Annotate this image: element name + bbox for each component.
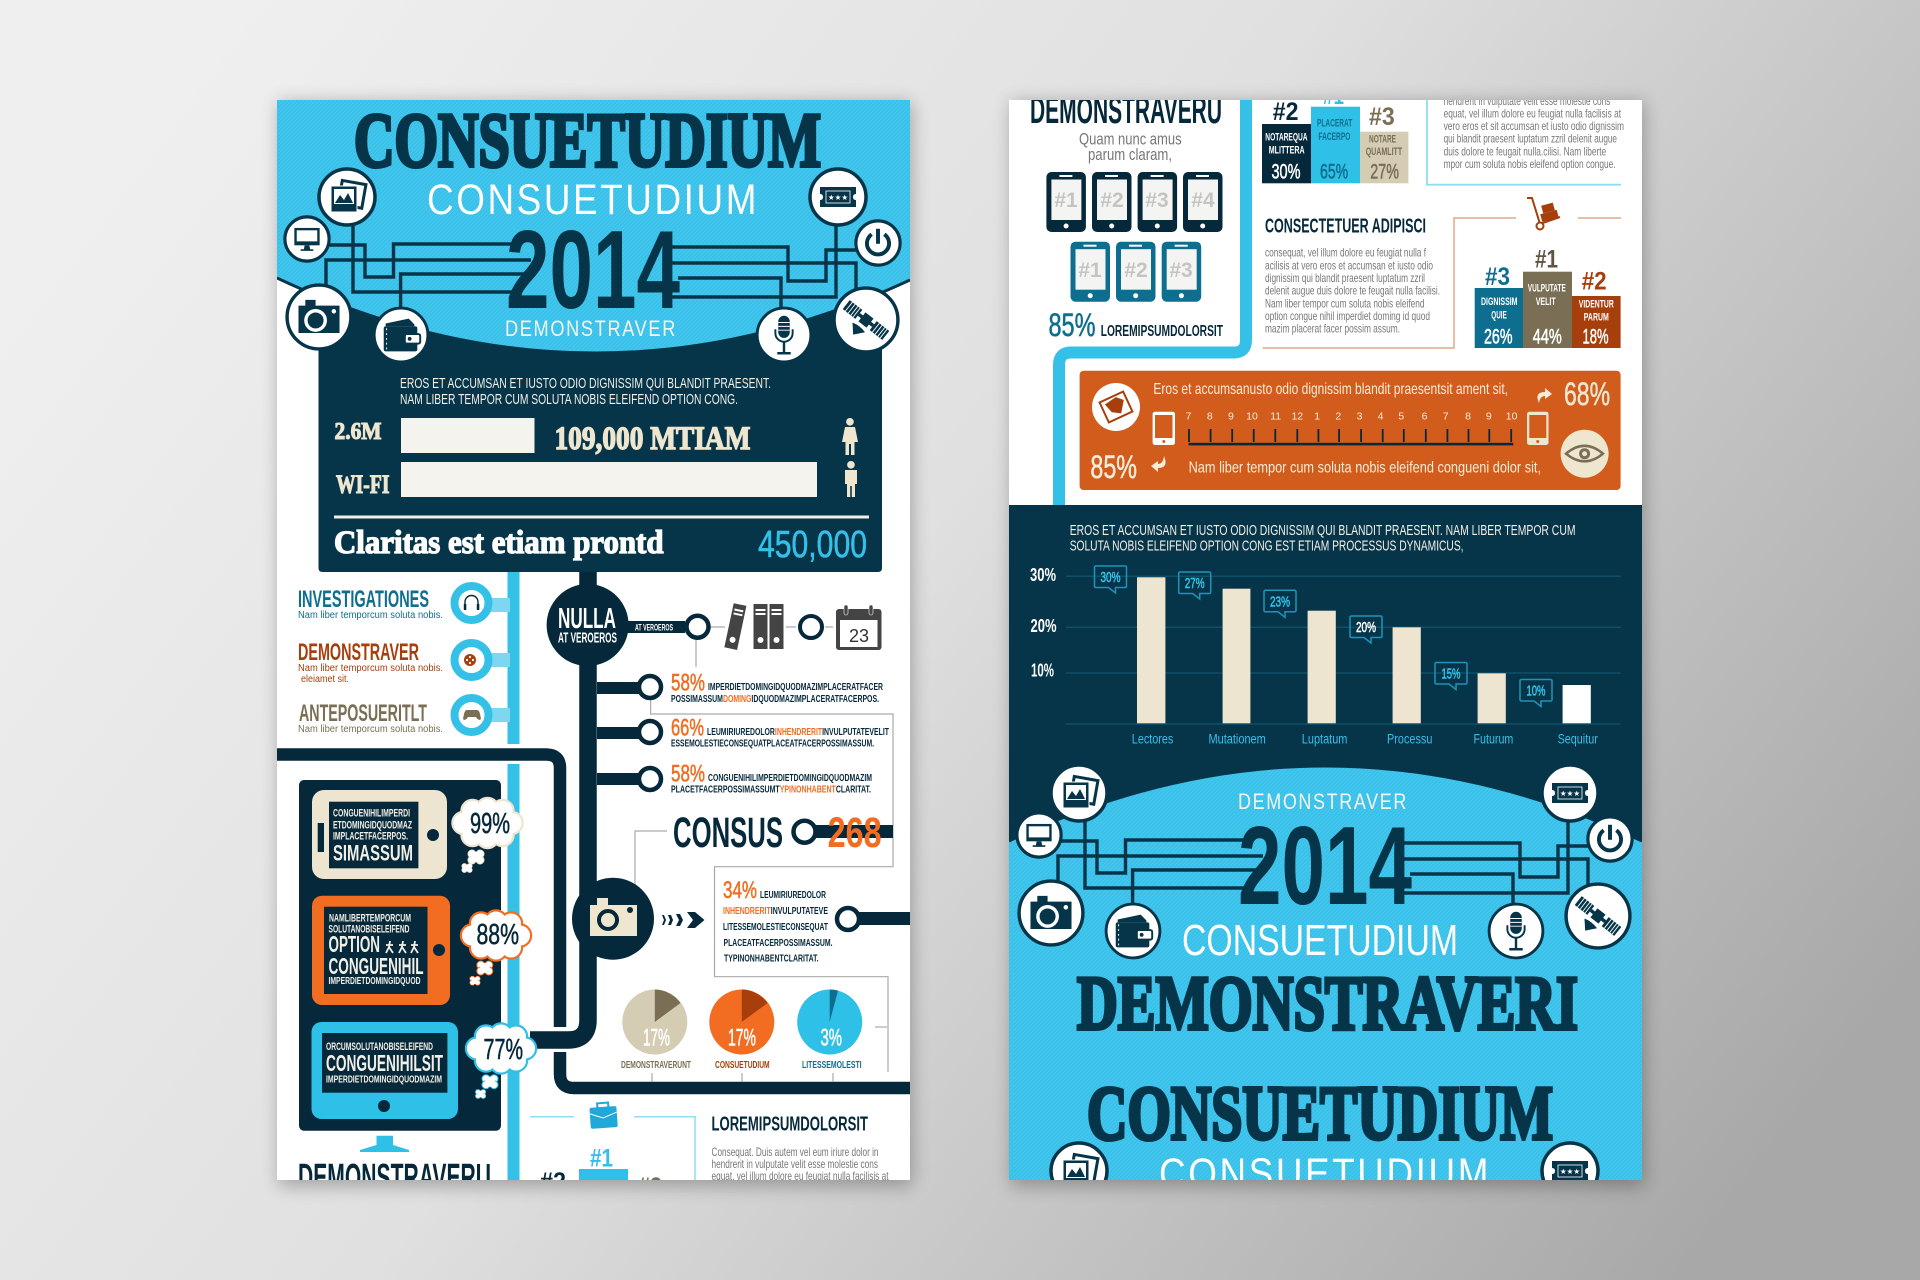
callout: 10% [1520, 680, 1552, 706]
podium: blue: NOTARE [1369, 133, 1396, 145]
footer label: DEMONSTRAVER [1238, 789, 1408, 814]
network lines [326, 225, 856, 312]
y axis labels: 20% [1030, 616, 1056, 636]
podium: blue: 30% [1272, 160, 1300, 183]
stat: 85%: 85% [1048, 307, 1096, 343]
blue vertical rail [508, 572, 520, 1180]
footer subtitle: CONSUETUDIUM [1182, 916, 1458, 965]
text block: 34%: TYPINONHABENTCLARITAT. [724, 953, 819, 965]
consus value: 268 [828, 809, 882, 857]
podium: rust: #2 [1582, 267, 1607, 295]
body text: consectetuer: Nam liber tempor cum soluta nobis eleifend [1265, 296, 1424, 310]
y axis labels: 30% [1030, 565, 1056, 585]
body text: top [1444, 94, 1624, 171]
icon: wallet [374, 308, 428, 362]
chart intro text: EROS ET ACCUMSAN ET IUSTO ODIO DIGNISSIM QUI BLANDIT PRAESENT. NAM LIBER TEMPOR CUM [1070, 522, 1576, 539]
arrow [1151, 456, 1166, 472]
podium: blue: QUAMLITT [1366, 146, 1402, 158]
consus bar and ring [794, 821, 893, 843]
phone rankings: dark row: #4 [1191, 189, 1215, 212]
body text: top: duis dolore te feugait nulla.cilisi. Nam liberte [1444, 144, 1606, 158]
icon: monitor [1017, 813, 1061, 857]
stat row: 66%: ESSEMOLESTIECONSEQUATPLACEATFACERPOSSIMASSUM. [671, 738, 874, 750]
body text [712, 1145, 889, 1183]
icon: binders [724, 603, 784, 650]
pie: demonstraverunt [621, 990, 691, 1071]
icon: camera [1019, 881, 1083, 945]
title: CONSUETUDIUM [354, 97, 821, 183]
thin connector lines [635, 627, 893, 1082]
stat label: WI-FI: WI-FI [336, 470, 390, 499]
timeline: 6 [1422, 410, 1428, 422]
stat label: 2.6M: 2.6M [334, 419, 382, 445]
timeline: 8 [1207, 410, 1213, 422]
stat: 68%: 68% [1564, 376, 1610, 412]
podium: rust: VULPUTATE [1528, 283, 1566, 295]
heading: demonstraveru: DEMONSTRAVERU [1030, 90, 1222, 132]
pie: demonstraverunt: DEMONSTRAVERUNT [621, 1059, 691, 1071]
x axis labels: Futurum [1474, 731, 1513, 746]
body text: consectetuer: consequat, vel illum dolore eu feugiat nulla f [1265, 246, 1426, 260]
callout: 27% [1179, 572, 1211, 599]
pie: consuetudium [709, 990, 774, 1071]
icon: microphone [1489, 904, 1543, 958]
phone rankings: dark row [1046, 172, 1222, 232]
icon: gamepad [454, 698, 488, 732]
icon: ticket repeat [1542, 1143, 1598, 1199]
callout: 30%: 30% [1100, 569, 1120, 586]
text block: 34%: INHENDRERITINVULPUTATEVE [723, 905, 828, 917]
arrow [1537, 388, 1552, 403]
text block: 34%: LITESSEMOLESTIECONSEQUAT [723, 921, 828, 933]
podium start: #3 [638, 1173, 662, 1201]
repeated subtitle: CONSUETUDIUM [1159, 1150, 1491, 1198]
branch: at veroeros: AT VEROEROS [635, 623, 673, 633]
callout: 23%: 23% [1270, 593, 1290, 610]
bar: 2.6M [401, 418, 534, 453]
heading: DEMONSTRAVER [298, 639, 419, 666]
x axis labels: Lectores [1132, 731, 1173, 746]
text line 2: Nam liber tempor cum soluta nobis eleifend congueni dolor sit, [1189, 460, 1541, 477]
arrows [662, 912, 704, 928]
icon: map badge [1092, 383, 1140, 431]
stat label: LOREMIPSUMDOLORSIT [1101, 323, 1223, 340]
chart intro text [1070, 522, 1576, 555]
icon: photos repeat [1051, 1143, 1107, 1199]
stat row: 58%: IMPERDIETDOMINGIDQUODMAZIMPLACERATFACER [708, 681, 883, 693]
thought bubble: 88% [461, 910, 531, 985]
stat row: 58%: 58% [671, 670, 705, 697]
heading: lorem ipsum: LOREMIPSUMDOLORSIT [712, 1114, 868, 1136]
body text: consectetuer: dignissim qui blandit praesent luptatum zzril [1265, 271, 1425, 285]
text block: 34% [723, 877, 833, 965]
year: 2014 [1238, 804, 1412, 928]
heading: INVESTIGATIONES [298, 586, 429, 613]
bars [1137, 577, 1591, 723]
subtitle: CONSUETUDIUM [427, 176, 759, 224]
timeline: 2 [1335, 410, 1341, 422]
pie: litessemolesti: 3% [820, 1025, 842, 1052]
phone rankings: teal row: #3 [1169, 259, 1193, 282]
icon: eye [1561, 430, 1609, 478]
body text: consectetuer: delenit augue duis dolore te feugait nulla facilisi. [1265, 284, 1440, 298]
footer title: DEMONSTRAVERI [1077, 960, 1578, 1046]
device: tablet: OPTION [328, 931, 380, 957]
x axis labels: Luptatum [1302, 731, 1347, 746]
podium: rust: #1 [1535, 246, 1558, 274]
repeated title: CONSUETUDIUM [1087, 1070, 1553, 1156]
footer: blue arch [1009, 766, 1642, 1182]
caption [298, 663, 443, 685]
total label: Claritas est etiam prontd [334, 525, 664, 561]
total value: 450,000 [758, 524, 867, 566]
blue rail [1059, 100, 1246, 505]
podium: blue: MLITTERA [1269, 144, 1305, 156]
phone rankings: teal row [1070, 242, 1201, 302]
thought bubble: 99% [452, 798, 522, 873]
hub: nulla: AT VEROEROS [558, 630, 617, 647]
light blue frame [1427, 100, 1621, 185]
podium: rust: DIGNISSIM [1481, 296, 1518, 308]
callout: 27%: 27% [1185, 575, 1205, 592]
device: phone: CONGUENIHILIMPERDI [333, 808, 410, 820]
branch: at veroeros [625, 616, 708, 638]
caption: Nam liber temporcum soluta nobis. [298, 610, 443, 621]
monitor stand [360, 1136, 409, 1152]
description text: EROS ET ACCUMSAN ET IUSTO ODIO DIGNISSIM QUI BLANDIT PRAESENT. [400, 375, 771, 392]
text line 1: Eros et accumsanusto odio dignissim blandit praesentsit ament sit, [1153, 381, 1508, 398]
podium: rust: VELIT [1536, 296, 1556, 308]
callout: 15%: 15% [1442, 666, 1460, 682]
icon: headphones [454, 586, 488, 620]
device: monitor: IMPERDIETDOMINGIDQUODMAZIM [326, 1074, 442, 1086]
phone rankings: teal row: #2 [1124, 259, 1148, 282]
x axis labels [1132, 731, 1598, 746]
ring with bar [837, 908, 910, 930]
thought bubble: 77%: 77% [484, 1034, 523, 1066]
x axis labels: Processu [1387, 731, 1432, 746]
pie: consuetudium: 17% [728, 1025, 756, 1052]
timeline: 7 [1186, 410, 1192, 422]
thin blue frame [530, 1117, 695, 1180]
icon: hand cart [1527, 198, 1560, 230]
x axis labels: Mutationem [1208, 731, 1266, 746]
orange frame [1262, 218, 1621, 348]
device: tablet [312, 896, 450, 1005]
text block: 34%: LEUMIRIUREDOLOR [760, 889, 826, 901]
icon: film reel [454, 643, 488, 677]
text block: 34%: 34% [723, 877, 757, 904]
podium: rust: QUIE [1491, 309, 1507, 321]
consus heading: CONSUS [673, 809, 783, 857]
hub: camera [572, 878, 654, 960]
x axis labels: Sequitur [1558, 731, 1598, 746]
timeline: 12 [1291, 410, 1303, 422]
ring [800, 616, 822, 638]
callout: 10%: 10% [1526, 682, 1546, 700]
timeline: 10 [1506, 410, 1518, 422]
podium: blue: PLACERAT [1317, 118, 1352, 130]
heading: consectetuer: CONSECTETUER ADIPISCI [1265, 216, 1426, 238]
callout: 20%: 20% [1356, 619, 1376, 636]
podium: rust: VIDENTUR [1579, 298, 1614, 310]
device: tablet: SOLUTANOBISELEIFEND [328, 923, 410, 935]
timeline: 4 [1378, 410, 1384, 422]
body text: top: qui blandit praesent luptatum zzril delenit augue [1444, 132, 1617, 146]
stat row: 66%: LEUMIRIUREDOLORINHENDRERITINVULPUTATEVELIT [707, 726, 889, 738]
device: tablet: NAMLIBERTEMPORCUM [329, 913, 411, 925]
icon: ticket [1542, 765, 1598, 821]
device: phone [312, 790, 447, 879]
podium: rust: 44% [1533, 325, 1562, 348]
podium: blue: 65% [1320, 160, 1348, 183]
description text [400, 378, 770, 404]
year: 2014 [506, 208, 680, 332]
panel: devices [299, 780, 501, 1131]
body text: consectetuer: mazim placerat facer possim assum. [1265, 322, 1400, 336]
dark pipe [277, 754, 910, 1088]
panel: orange timeline [1080, 371, 1621, 490]
arch edge [1009, 766, 1642, 841]
stat row: 66% [597, 715, 889, 750]
icon: satellite [834, 288, 898, 352]
icon: calendar: 23 [849, 626, 869, 646]
description text: NAM LIBER TEMPOR CUM SOLUTA NOBIS ELEIFEND OPTION CONG. [400, 391, 738, 408]
timeline [1186, 410, 1518, 445]
podium: rust: #3 [1485, 263, 1510, 291]
dark trunk [530, 572, 588, 1040]
body text: top: mpor cum soluta nobis eleifend option congue. [1444, 157, 1616, 171]
body text: top: vero eros et sit accumsan et iusto odio dignissim [1444, 119, 1624, 133]
phone rankings: dark row: #2 [1100, 189, 1124, 212]
thought bubble: 77% [466, 1024, 536, 1099]
icon: ticket [810, 169, 866, 225]
phone rankings: teal row: #1 [1078, 259, 1102, 282]
poster panel: right [1009, 82, 1642, 1199]
card shadows [279, 102, 1644, 1186]
icon: microphone [757, 308, 811, 362]
icon: satellite [1566, 884, 1630, 948]
stat row: 58%: POSSIMASSUMDOMINGIDQUODMAZIMPLACERATFACERPOS. [671, 693, 879, 705]
timeline: 9 [1486, 410, 1492, 422]
podium start: #2 [540, 1168, 566, 1196]
icon: power [1588, 817, 1632, 861]
phone rankings: dark row: #1 [1054, 189, 1078, 212]
body text: top: hendrerit in vulputate velit esse molestie cons [1444, 94, 1610, 108]
bar: WI-FI [401, 462, 817, 497]
icon: power [856, 221, 900, 265]
callout: 20% [1350, 616, 1382, 643]
callout: 30% [1094, 566, 1126, 593]
body text: consectetuer: option congue nihil imperdiet doming id quod [1265, 309, 1430, 323]
stat row: 58% second: CONGUENIHILIMPERDIETDOMINGIDQUODMAZIM [708, 772, 872, 784]
podium: blue: FACERPO [1318, 131, 1351, 143]
subheading: Quam nunc amus [1079, 129, 1182, 148]
body text: equat, vel illum dolore eu feugiat nulla facilisis at [712, 1169, 889, 1183]
pie: consuetudium: CONSUETUDIUM [715, 1059, 770, 1071]
device: phone: SIMASSUM [333, 841, 413, 866]
podium start: #1 [590, 1145, 613, 1173]
pie: litessemolesti [797, 990, 862, 1071]
stat row: 58% [597, 670, 883, 705]
pie: litessemolesti: LITESSEMOLESTI [802, 1059, 862, 1071]
icon: man [845, 461, 857, 497]
chart intro text: SOLUTA NOBIS ELEIFEND OPTION CONG EST ETIAM PROCESSUS DYNAMICUS, [1070, 538, 1464, 555]
list: demonstraver [298, 639, 510, 685]
list: anteposueritlt [298, 698, 510, 735]
podium start [540, 1145, 662, 1201]
header: blue arch [277, 100, 910, 353]
stat row: 66%: 66% [671, 715, 704, 742]
icon: phone right [1527, 412, 1548, 445]
panel: bar chart [1009, 505, 1642, 845]
podium: rust: PARUM [1584, 312, 1609, 324]
podium: blue: #3 [1369, 103, 1395, 131]
podium: rust [1475, 246, 1621, 348]
timeline: 8 [1465, 410, 1471, 422]
stat row: 58% second [597, 761, 872, 796]
device: monitor: CONGUENIHILSIT [326, 1050, 443, 1076]
stat: 109,000 MTIAM: 109,000 MTIAM [554, 421, 750, 457]
network lines [1058, 821, 1588, 908]
podium: blue: #1 [1323, 82, 1344, 110]
podium: blue [1262, 82, 1408, 183]
stat row: 58% second: 58% [671, 761, 705, 788]
poster panel: left [277, 97, 910, 1201]
y axis labels: 10% [1031, 661, 1054, 681]
y axis labels [1030, 565, 1056, 681]
icon: photos [319, 169, 375, 225]
caption: eleiamet sit. [301, 674, 349, 685]
device: phone: IMPLACETFACERPOS. [333, 830, 408, 842]
timeline: 1 [1314, 410, 1320, 422]
subheading [1079, 129, 1182, 164]
podium: blue: NOTAREQUA [1265, 132, 1308, 144]
timeline: 11 [1270, 410, 1281, 422]
pie: demonstraverunt: 17% [643, 1025, 670, 1052]
body text: top: equat, vel illum dolore eu feugiat nulla facilisis at [1444, 107, 1621, 121]
phone rankings: dark row: #3 [1145, 189, 1169, 212]
heading: ANTEPOSUERITLT [299, 700, 427, 727]
icon: wallet [1106, 904, 1160, 958]
thought bubble: 99%: 99% [470, 808, 510, 840]
icon: briefcase [589, 1102, 618, 1129]
arch edge [277, 278, 910, 353]
icon: monitor [285, 217, 329, 261]
podium: blue: #2 [1273, 98, 1298, 126]
icon: woman [842, 418, 858, 455]
podium: rust: 26% [1484, 325, 1512, 348]
timeline: 10 [1246, 410, 1258, 422]
hub: nulla [547, 584, 629, 666]
stat: 85%: 85% [1090, 449, 1137, 485]
hub: nulla: NULLA [558, 603, 616, 635]
thought bubble: 88%: 88% [476, 919, 519, 951]
text block: 34%: PLACEATFACERPOSSIMASSUM. [724, 937, 833, 949]
body text: consectetuer [1265, 246, 1440, 336]
callout: 15% [1435, 662, 1467, 690]
icon: calendar [836, 605, 882, 650]
icon: photos [1051, 765, 1107, 821]
callout: 23% [1264, 590, 1296, 617]
timeline: 5 [1398, 410, 1404, 422]
caption: Nam liber temporcum soluta nobis. [298, 724, 443, 735]
icon: phone left [1153, 412, 1175, 445]
timeline: 7 [1443, 410, 1449, 422]
caption: Nam liber temporcum soluta nobis. [298, 663, 443, 674]
device: tablet: CONGUENIHIL [328, 953, 424, 979]
device: tablet: IMPERDIETDOMINGIDQUOD [328, 975, 421, 987]
icon: camera [287, 285, 351, 349]
panel: stats [318, 290, 882, 572]
podium: rust: 18% [1582, 325, 1608, 348]
body text: hendrerit in vulputate velit esse molestie cons [712, 1157, 878, 1171]
divider [334, 516, 869, 518]
body text: consectetuer: acilisis at vero eros et accumsan et iusto odio [1265, 258, 1433, 272]
device: monitor [312, 1022, 458, 1119]
podium: blue: 27% [1370, 160, 1399, 183]
stat row: 58% second: PLACETFACERPOSSIMASSUMTYPINONHABENTCLARITAT. [671, 784, 871, 796]
subheading: parum claram, [1088, 145, 1172, 164]
device: phone: ETDOMINGIDQUODMAZ [333, 819, 412, 831]
icon: walking people [386, 941, 418, 953]
device: monitor: ORCUMSOLUTANOBISELEIFEND [326, 1041, 433, 1053]
list: investigationes [298, 586, 510, 621]
body text: Consequat. Duis autem vel eum iriure dolor in [712, 1145, 878, 1159]
timeline: 3 [1357, 410, 1363, 422]
header label: DEMONSTRAVER [505, 316, 677, 341]
timeline: 9 [1228, 410, 1234, 422]
heading: demonstraveru: DEMONSTRAVERU [298, 1157, 491, 1199]
